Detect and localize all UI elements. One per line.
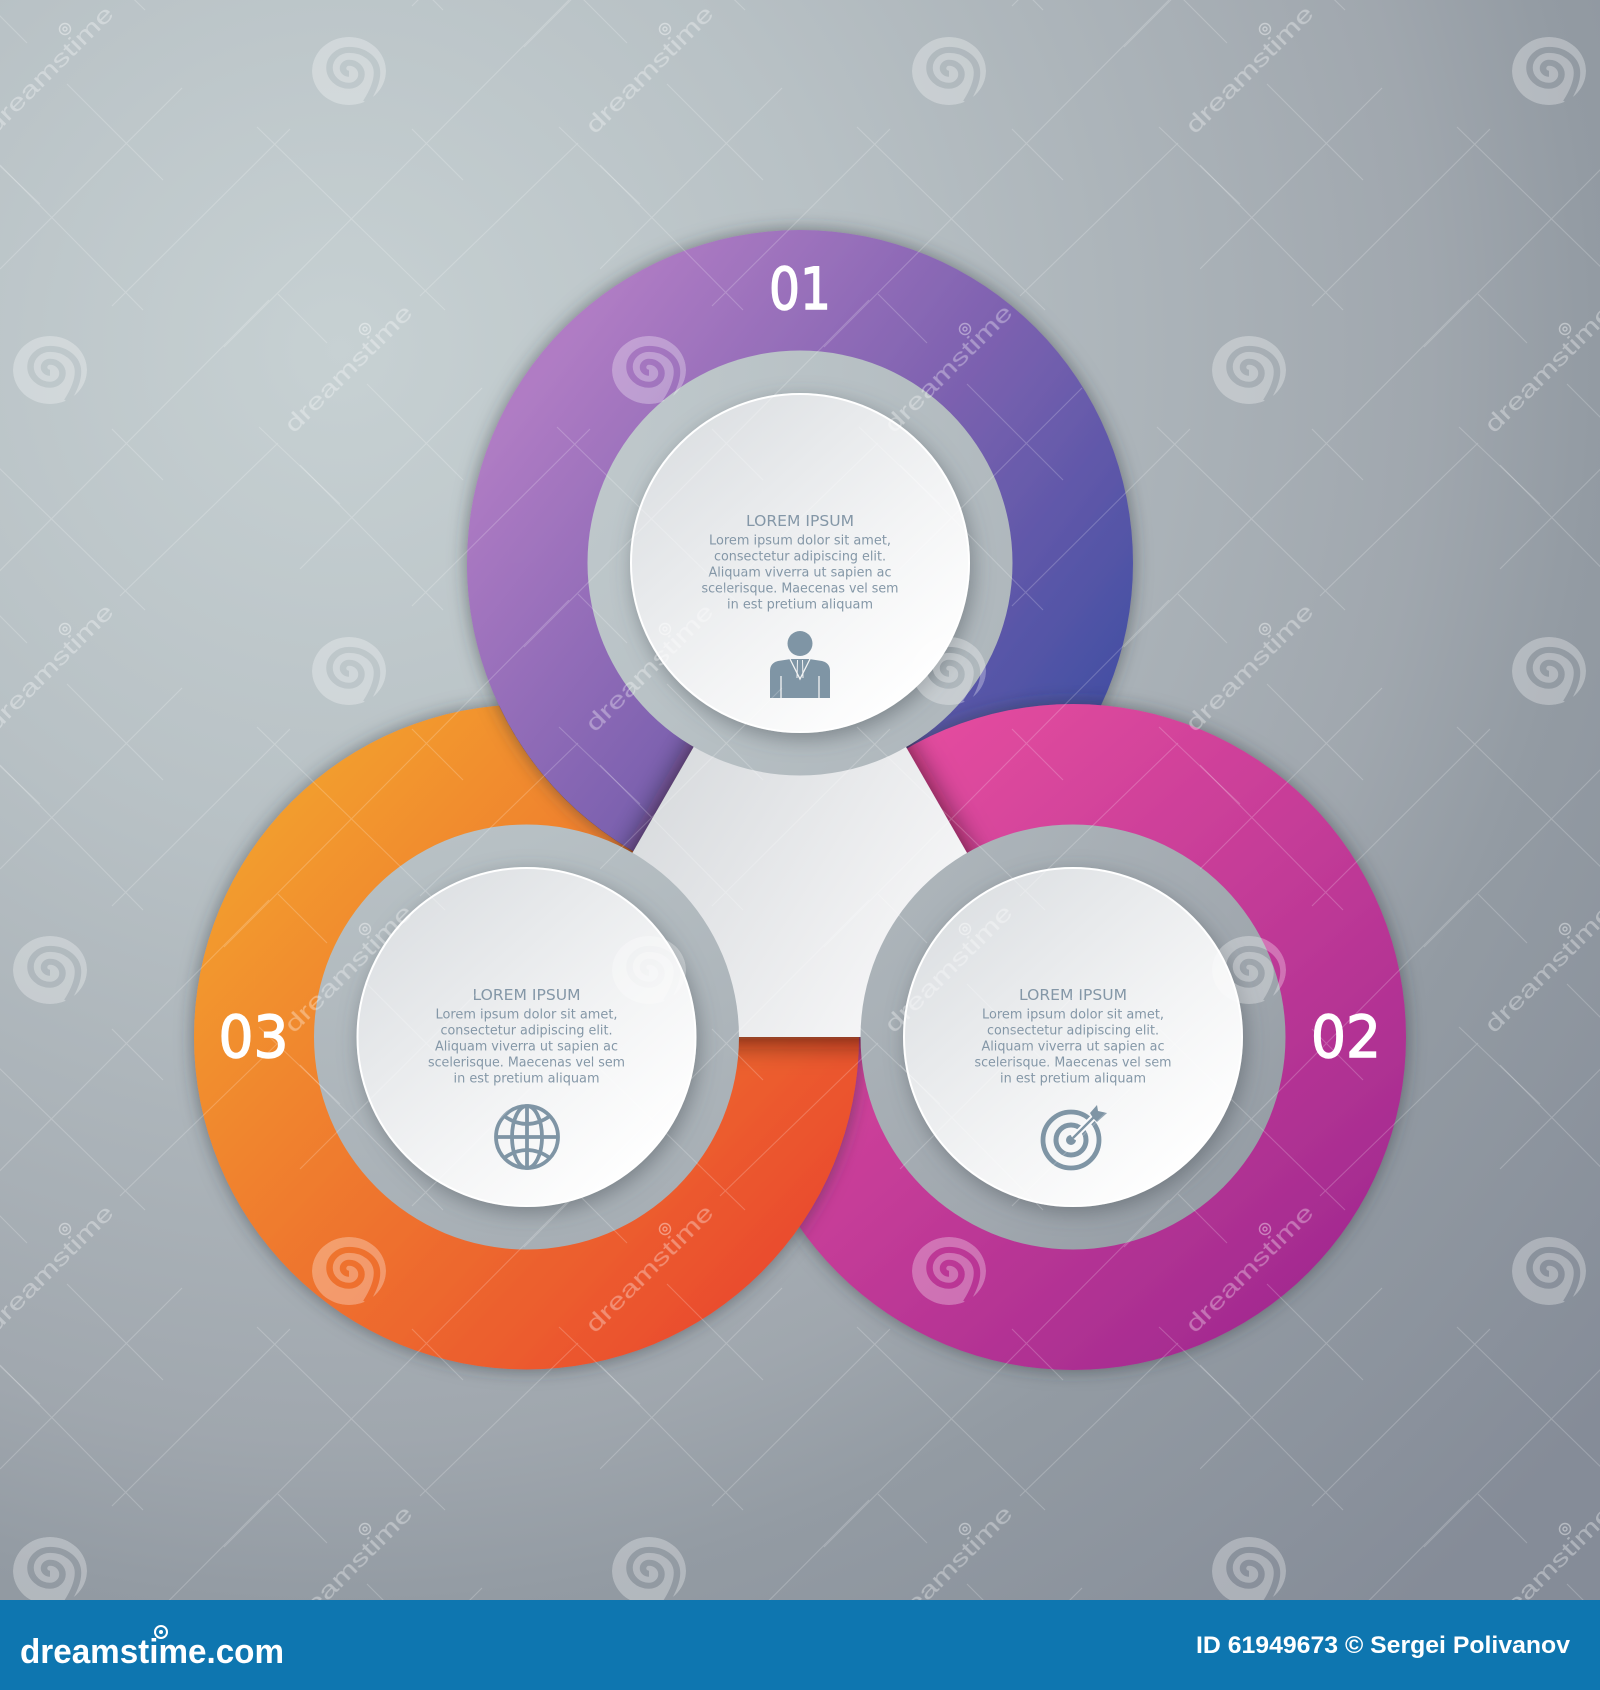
panel 01 text: LOREM IPSUM	[746, 512, 854, 530]
panel 01 text: scelerisque. Maecenas vel sem	[702, 580, 898, 596]
panel 02 text: Lorem ipsum dolor sit amet,	[982, 1006, 1164, 1022]
center triangle	[526, 563, 1073, 1037]
watermark text: dreamstime	[1479, 1500, 1600, 1639]
icon: globe	[496, 1106, 558, 1168]
watermark text: dreamstime	[279, 899, 418, 1038]
footer credit: ID 61949673 © Sergei Polivanov	[1196, 1632, 1571, 1659]
number 02: 02	[1311, 1003, 1381, 1071]
watermark text: dreamstime	[1180, 598, 1319, 737]
watermark text: dreamstime	[580, 0, 719, 139]
panel 03 center disc	[314, 824, 739, 1250]
panel 02 text: scelerisque. Maecenas vel sem	[974, 1054, 1172, 1070]
number 03: 03	[218, 1003, 288, 1071]
panel 03 text: consectetur adipiscing elit.	[440, 1022, 612, 1038]
panel 02 text: Aliquam viverra ut sapien ac	[982, 1038, 1164, 1054]
panel 03 text	[428, 986, 625, 1086]
purple overlap over orange	[467, 567, 694, 853]
footer logo: dreamstime.com	[20, 1633, 284, 1671]
watermark text: dreamstime	[1180, 0, 1319, 139]
watermark text: dreamstime	[279, 1500, 418, 1639]
watermark text: dreamstime	[279, 299, 418, 438]
panel 02 text: in est pretium aliquam	[1000, 1070, 1146, 1086]
watermark text: dreamstime	[1180, 1199, 1319, 1338]
ring 03 orange	[194, 704, 859, 1370]
watermark text: dreamstime	[879, 299, 1018, 438]
panel 01 center disc	[588, 350, 1012, 776]
watermark text: dreamstime	[879, 1500, 1018, 1639]
watermark text: dreamstime	[580, 598, 719, 737]
ring 01 purple	[467, 230, 1133, 896]
panel 03 text: scelerisque. Maecenas vel sem	[428, 1054, 625, 1070]
icon: target with arrow	[1043, 1105, 1107, 1168]
panel 01 text: consectetur adipiscing elit.	[714, 548, 886, 564]
panel 02 text	[974, 986, 1172, 1086]
panel 01 text: Aliquam viverra ut sapien ac	[708, 564, 892, 580]
panel 03 text: Aliquam viverra ut sapien ac	[435, 1038, 618, 1054]
icon: businessman	[770, 631, 830, 698]
watermark text: dreamstime	[1479, 299, 1600, 438]
panel 03 text: LOREM IPSUM	[472, 986, 580, 1004]
panel 01 text: in est pretium aliquam	[727, 596, 873, 612]
panel 02 text: LOREM IPSUM	[1019, 986, 1127, 1004]
watermark text: dreamstime	[580, 1199, 719, 1338]
panel 03 text: in est pretium aliquam	[454, 1070, 600, 1086]
panel 02 center disc	[860, 824, 1286, 1250]
panel 01 text	[702, 512, 898, 612]
ring 02 magenta	[740, 704, 1406, 1370]
number 01: 01	[769, 255, 831, 323]
panel 02 text: consectetur adipiscing elit.	[987, 1022, 1159, 1038]
footer banner	[0, 1600, 1600, 1690]
watermark text: dreamstime	[1479, 899, 1600, 1038]
panel 03 text: Lorem ipsum dolor sit amet,	[436, 1006, 618, 1022]
panel 01 text: Lorem ipsum dolor sit amet,	[709, 532, 891, 548]
watermark text: dreamstime	[879, 899, 1018, 1038]
